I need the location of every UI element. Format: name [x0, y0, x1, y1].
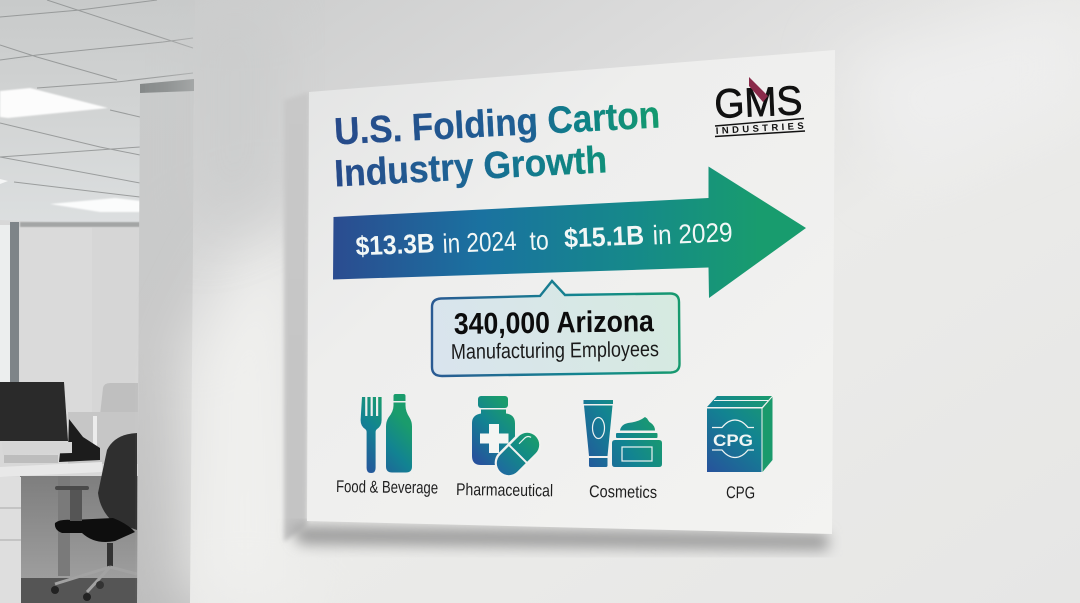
icon: fork and bottle — [361, 394, 412, 473]
logo: GMS Industries: INDUSTRIES — [716, 121, 804, 137]
cubicle panels — [68, 383, 138, 464]
icon labels — [336, 477, 755, 502]
logo: GMS Industries: GMS — [713, 77, 803, 127]
callout: Arizona employees: 340,000 Arizona — [454, 305, 654, 341]
title: U.S. Folding Carton — [333, 94, 661, 153]
window — [0, 222, 19, 382]
office chair — [51, 433, 137, 601]
arrow text: growth figures: $13.3B — [355, 228, 435, 261]
pillar — [137, 79, 194, 603]
title: Industry Growth — [333, 139, 608, 195]
callout: Arizona employees: Manufacturing Employees — [451, 337, 659, 364]
ceiling lights — [0, 88, 141, 212]
desk and drawers — [0, 462, 102, 603]
sign shadow — [284, 92, 828, 550]
back walls — [20, 222, 140, 418]
icon labels: Pharmaceutical — [456, 480, 553, 500]
background office interior — [0, 0, 196, 603]
growth arrow — [333, 166, 806, 298]
arrow text: growth figures: $15.1B — [563, 220, 645, 253]
icon labels: Cosmetics — [589, 482, 657, 502]
icon labels: CPG — [726, 483, 755, 502]
monitor — [0, 382, 72, 463]
icon: pharmaceutical bottle and capsule — [472, 396, 547, 483]
arrow text: growth figures: in 2029 — [652, 217, 733, 250]
icon labels: Food & Beverage — [336, 477, 438, 497]
icon: CPG carton — [707, 396, 772, 472]
callout: Arizona employees — [432, 281, 680, 376]
panel: sign board — [307, 50, 835, 534]
icon: cosmetics tube and cream jar — [584, 400, 662, 467]
black bag — [59, 419, 100, 462]
under-desk area and floor — [20, 476, 138, 603]
arrow text: growth figures: in 2024 — [442, 226, 517, 259]
title — [333, 94, 661, 195]
icon: CPG carton: CPG — [713, 431, 753, 450]
ceiling grid — [0, 0, 196, 226]
arrow text: growth figures: to — [529, 225, 549, 256]
arrow text: growth figures — [355, 217, 733, 261]
